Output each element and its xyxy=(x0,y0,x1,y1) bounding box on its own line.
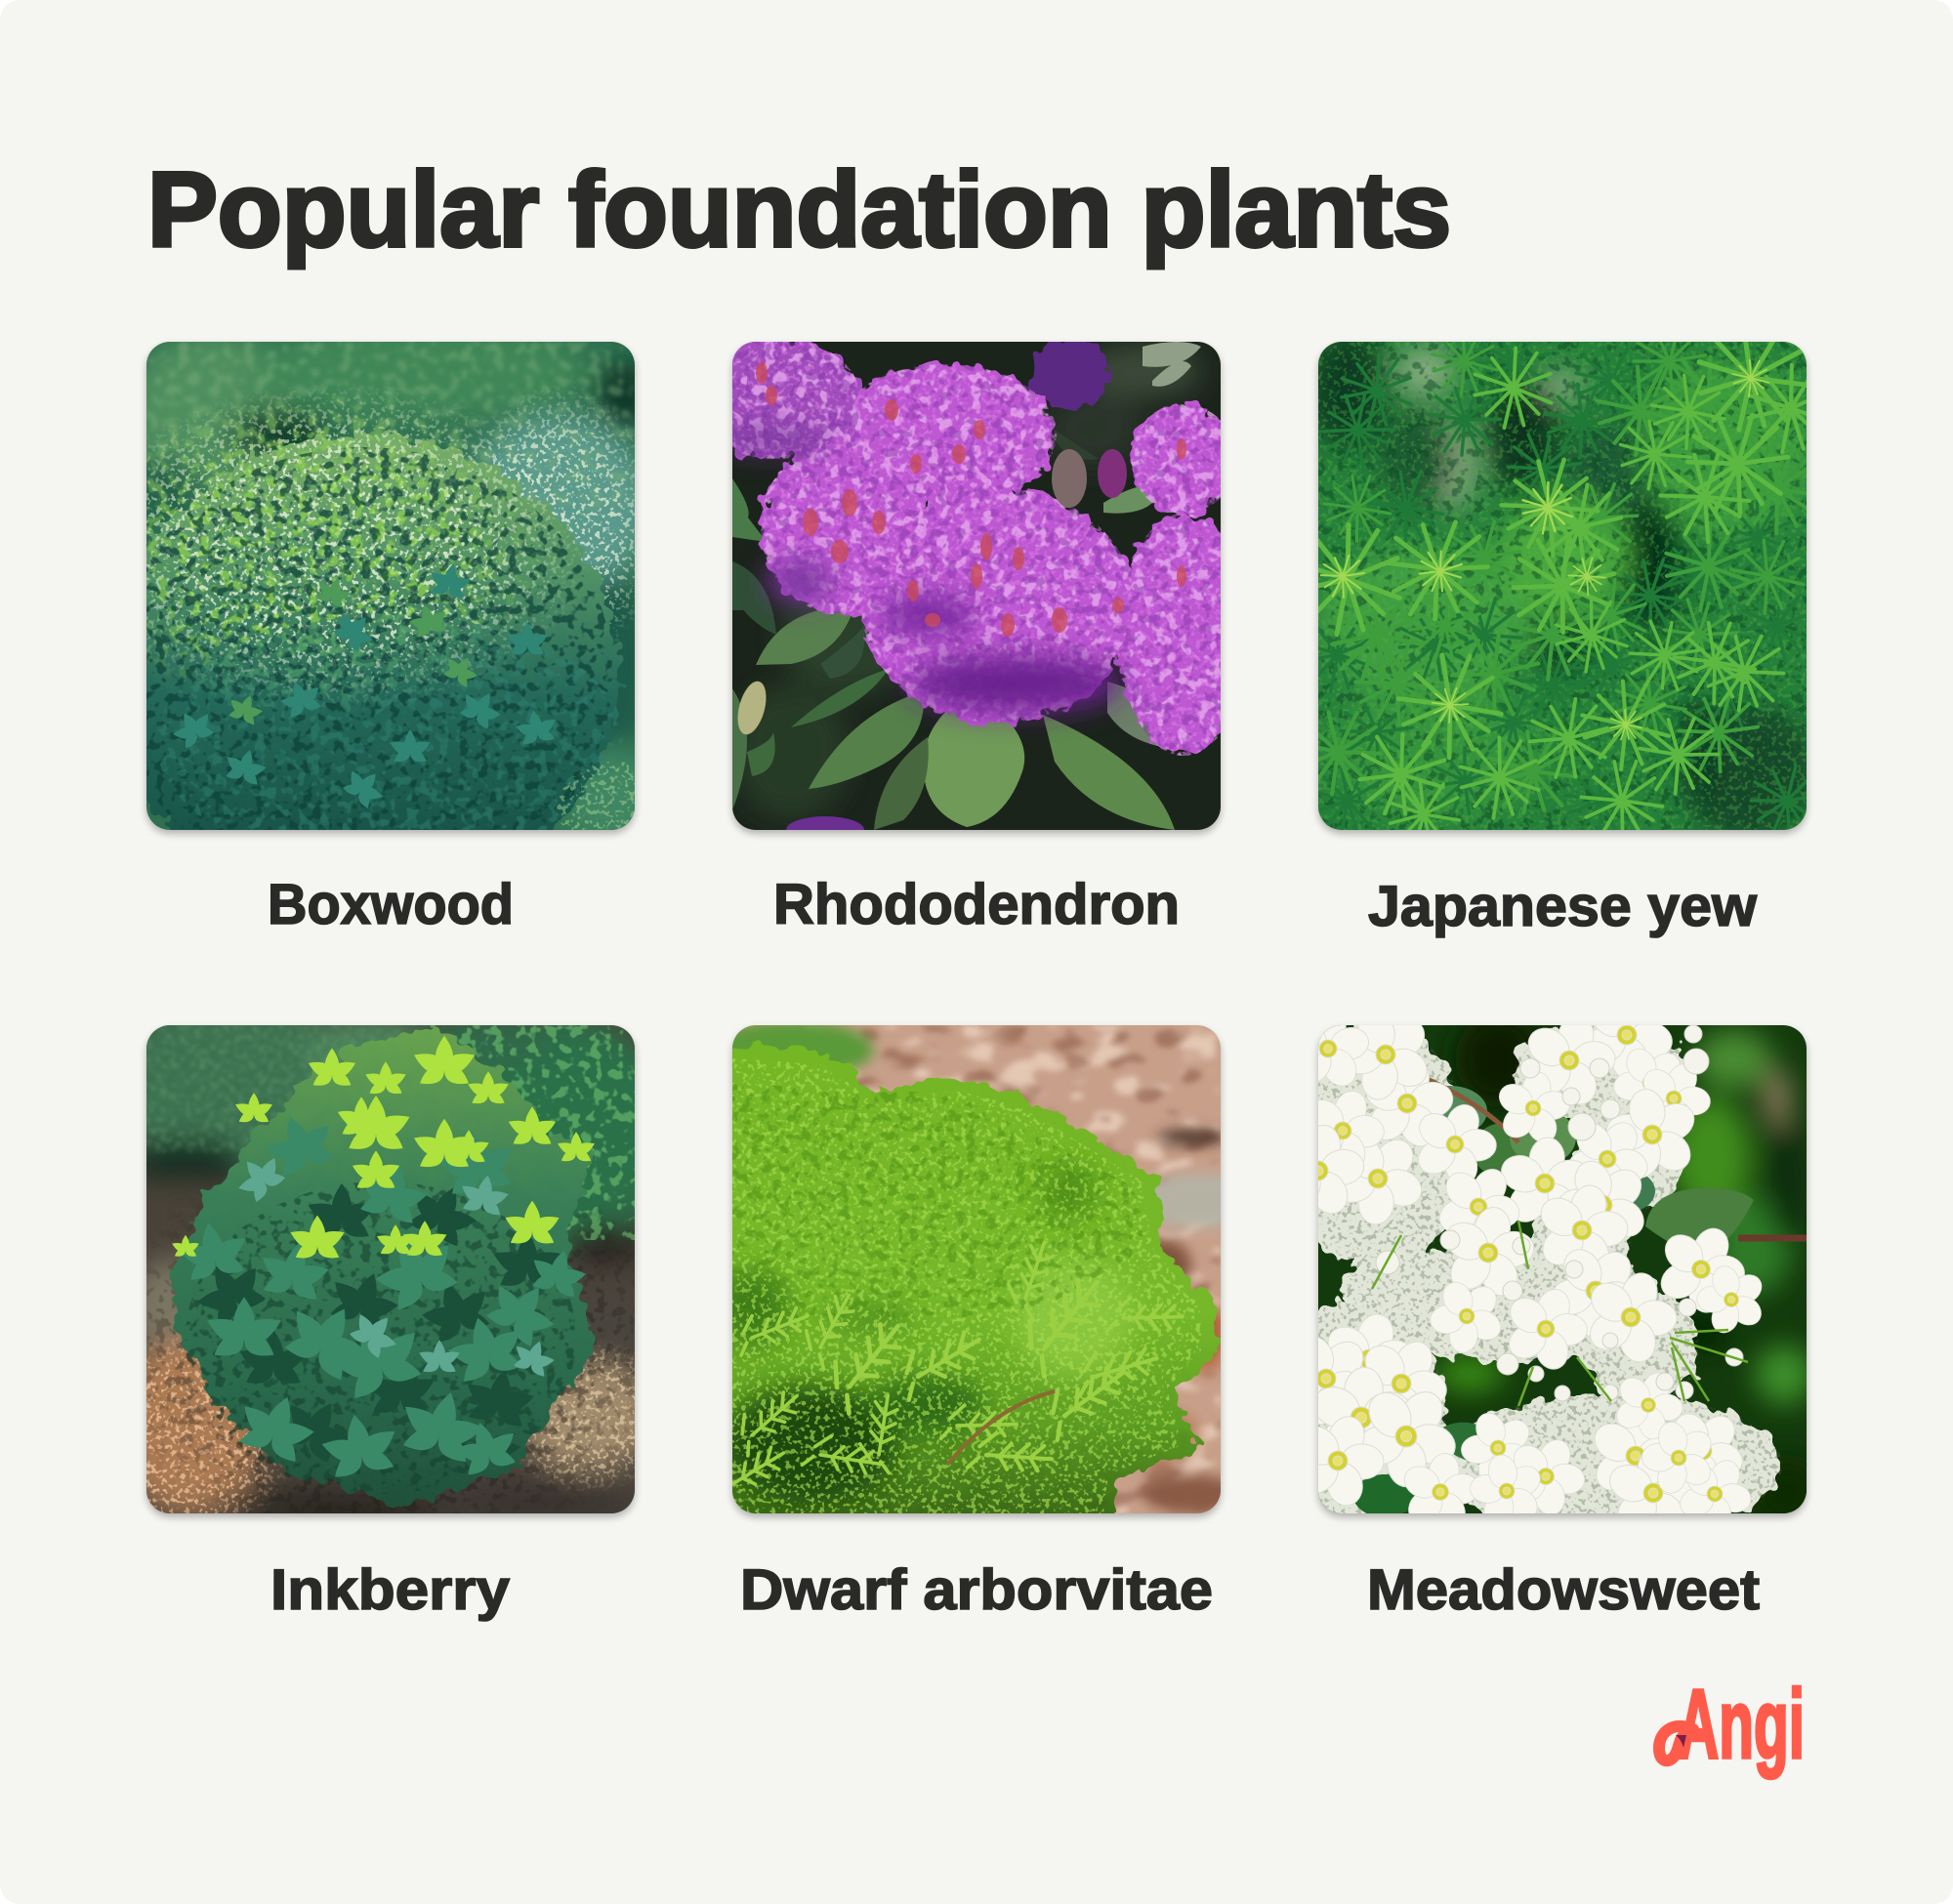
flower clusters xyxy=(732,342,1221,754)
leaves xyxy=(732,342,1201,830)
panel: dwarf arborvitae xyxy=(728,1025,1225,1611)
shrub ball xyxy=(146,431,627,830)
froth of stamens xyxy=(1269,1020,1782,1535)
label: Inkberry: Inkberry xyxy=(270,1558,510,1622)
panel: Japanese yew xyxy=(1314,342,1810,938)
meadowsweet flowers xyxy=(1258,971,1780,1547)
shrub body xyxy=(713,1045,1218,1533)
logo loop xyxy=(1659,1726,1693,1760)
photo: inkberry shrub xyxy=(146,1025,635,1513)
logo: Angi xyxy=(1659,1670,1805,1779)
panel: inkberry xyxy=(143,1025,639,1622)
stems xyxy=(1372,1221,1748,1406)
photo: boxwood shrub xyxy=(146,342,635,830)
flower throats xyxy=(756,362,1186,637)
panel: meadowsweet xyxy=(1258,971,1826,1622)
photo: dwarf arborvitae shrub xyxy=(732,1025,1221,1513)
photo: meadowsweet blossoms xyxy=(1258,971,1826,1547)
label: Boxwood: Boxwood xyxy=(268,873,514,936)
shrub body xyxy=(171,1030,596,1506)
label: Rhododendron: Rhododendron xyxy=(773,873,1180,936)
meadowsweet leaves xyxy=(1353,1074,1754,1517)
meadowsweet buds xyxy=(1376,1025,1743,1401)
title: Popular foundation plants xyxy=(147,150,1451,269)
logo: Angi: Angi xyxy=(1678,1670,1805,1779)
mulch xyxy=(854,1025,1221,1513)
label: Japanese yew: Japanese yew xyxy=(1368,875,1758,938)
logo fold xyxy=(1676,1735,1686,1748)
photo: Japanese yew needles xyxy=(1318,342,1807,830)
rhododendron buds xyxy=(732,449,1127,737)
panel: rhododendron xyxy=(728,342,1225,926)
label: Meadowsweet: Meadowsweet xyxy=(1367,1558,1760,1622)
panel: boxwood xyxy=(143,342,639,926)
photo: rhododendron blooms xyxy=(732,342,1221,830)
dark top bloom xyxy=(1030,336,1108,410)
label: Dwarf arborvitae: Dwarf arborvitae xyxy=(740,1558,1213,1622)
